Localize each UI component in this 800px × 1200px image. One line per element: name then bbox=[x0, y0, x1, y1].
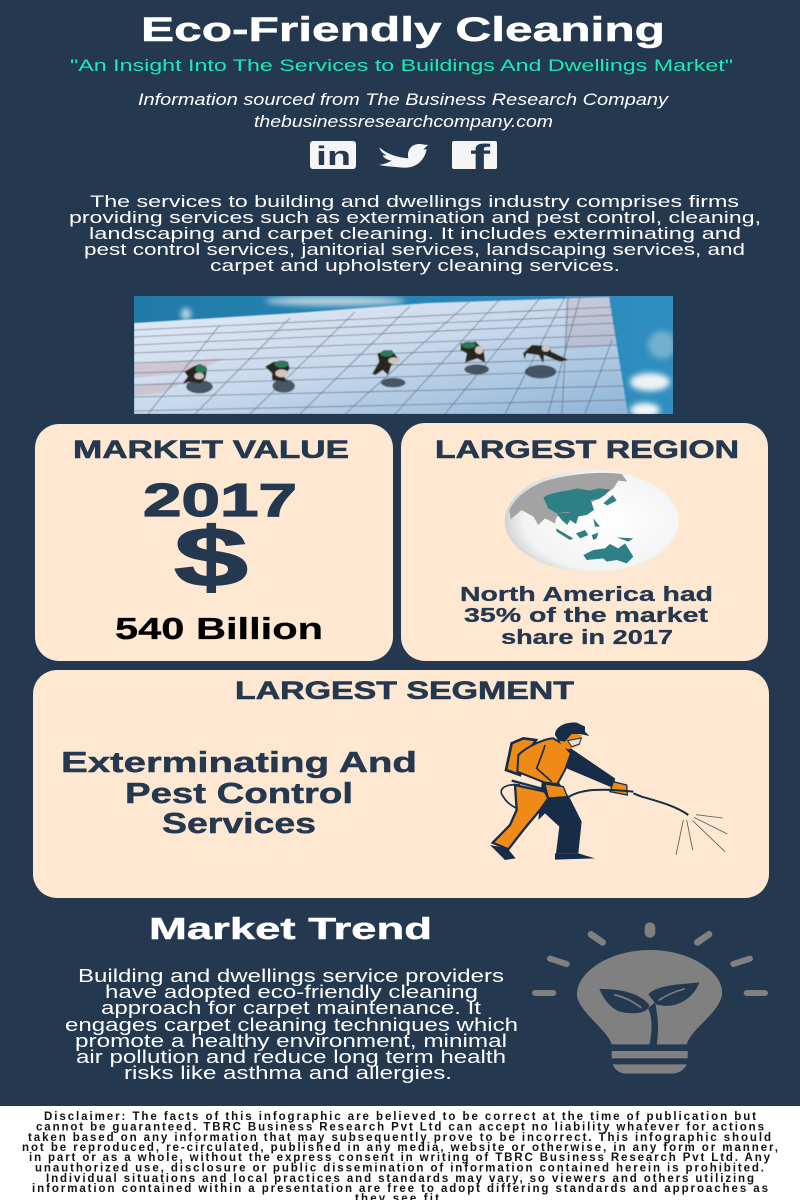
intro paragraph: carpet and upholstery cleaning services. bbox=[210, 257, 620, 275]
segment text: Services bbox=[162, 808, 316, 840]
market trend text: risks like asthma and allergies. bbox=[124, 1062, 452, 1083]
segment text: Pest Control bbox=[125, 778, 353, 810]
disclaimer bbox=[0, 1106, 800, 1200]
subtitle: "An Insight Into The Services to Buildings And Dwellings Market" bbox=[70, 56, 733, 75]
source text bbox=[138, 90, 670, 131]
icon: pest control worker bbox=[490, 723, 727, 860]
panel: largest region bbox=[401, 423, 768, 661]
market trend text: promote a healthy environment, minimal bbox=[75, 1030, 507, 1051]
disclaimer: taken based on any information that may subsequently prove to be incorrect. This infographic should bbox=[28, 1132, 771, 1144]
heading: market value: MARKET VALUE bbox=[73, 436, 349, 464]
region text bbox=[460, 583, 713, 649]
year: 2017 bbox=[143, 474, 297, 526]
icon: dollar: $ bbox=[174, 510, 248, 604]
panel: market value bbox=[35, 424, 393, 661]
heading: largest segment: LARGEST SEGMENT bbox=[235, 677, 574, 705]
icon: facebook bbox=[452, 138, 497, 177]
icon: light bulb with plant bbox=[535, 928, 765, 1074]
icon: linkedin: in bbox=[316, 141, 351, 171]
segment text: Exterminating And bbox=[61, 747, 417, 779]
source text: Information sourced from The Business Research Company bbox=[138, 90, 670, 109]
market trend text: Building and dwellings service providers bbox=[78, 965, 504, 986]
disclaimer: cannot be guaranteed. TBRC Business Research Pvt Ltd can accept no liability whatever for actions bbox=[36, 1122, 764, 1134]
segment text bbox=[61, 747, 417, 840]
social icons bbox=[310, 138, 497, 177]
title: Eco-Friendly Cleaning bbox=[141, 11, 665, 49]
market trend text: engages carpet cleaning techniques which bbox=[65, 1014, 518, 1035]
icon: facebook: f bbox=[470, 138, 491, 177]
photo: window cleaners on glass building bbox=[134, 296, 676, 417]
intro paragraph: landscaping and carpet cleaning. It includes exterminating and bbox=[89, 225, 741, 243]
disclaimer: in part or as a whole, without the express consent in writing of TBRC Business Research Pvt Ltd. Any bbox=[29, 1152, 771, 1164]
disclaimer: not be reproduced, re-circulated, published in any media, website or otherwise, in any form or manner, bbox=[22, 1142, 778, 1154]
region text: share in 2017 bbox=[501, 626, 673, 649]
workers bbox=[183, 342, 569, 393]
market trend text bbox=[65, 965, 518, 1083]
source text: thebusinessresearchcompany.com bbox=[254, 112, 553, 131]
intro paragraph: providing services such as extermination and pest control, cleaning, bbox=[69, 209, 761, 227]
intro paragraph bbox=[69, 193, 761, 275]
disclaimer: Disclaimer: The facts of this infographic are believed to be correct at the time of publication but bbox=[44, 1111, 756, 1123]
market trend text: approach for carpet maintenance. It bbox=[101, 997, 481, 1018]
disclaimer: information contained within a presentation are free to adopt differing standards and approaches as bbox=[32, 1183, 768, 1195]
region text: 35% of the market bbox=[464, 604, 708, 627]
disclaimer: Individual situations and local practices and standards may vary, so viewers and others utilizing bbox=[46, 1173, 754, 1185]
value: 540 Billion bbox=[115, 611, 323, 646]
market trend text: air pollution and reduce long term health bbox=[76, 1046, 506, 1067]
intro paragraph: pest control services, janitorial services, landscaping services, and bbox=[84, 241, 745, 259]
heading: largest region: LARGEST REGION bbox=[435, 436, 739, 464]
intro paragraph: The services to building and dwellings industry comprises firms bbox=[90, 193, 739, 211]
icon: twitter bbox=[379, 144, 428, 168]
panel: largest segment bbox=[33, 670, 769, 898]
heading: market trend: Market Trend bbox=[149, 911, 432, 946]
icon: linkedin bbox=[310, 141, 356, 171]
icon: globe bbox=[505, 470, 679, 572]
region text: North America had bbox=[460, 583, 713, 606]
disclaimer: unauthorized use, disclosure or public dissemination of information contained herein is prohibited. bbox=[35, 1162, 764, 1174]
market trend text: have adopted eco-friendly cleaning bbox=[105, 981, 478, 1002]
